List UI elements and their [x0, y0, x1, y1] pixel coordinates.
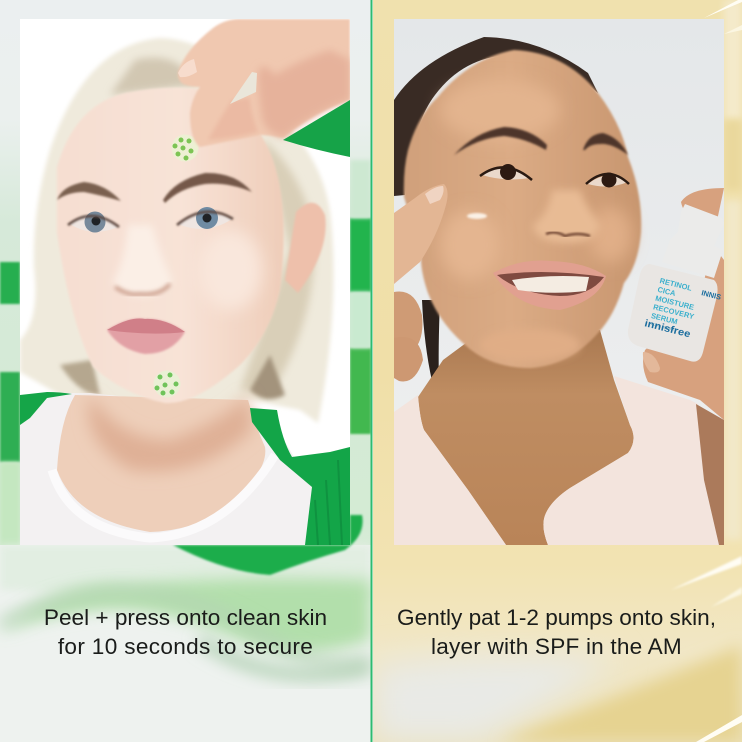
thumb over bottle	[643, 352, 660, 372]
brows	[454, 127, 547, 155]
caption: left instruction	[44, 605, 327, 658]
caption: right instruction: Gently pat 1-2 pumps onto skin,	[397, 605, 716, 630]
nose	[533, 190, 600, 243]
patch: forehead	[172, 134, 198, 162]
neck and chest	[57, 395, 265, 532]
green patch sheet	[283, 100, 350, 157]
ear	[285, 203, 326, 293]
white top	[20, 393, 312, 545]
white blouse	[394, 376, 719, 545]
bottle label: SERUM	[650, 311, 679, 326]
patch: chin	[154, 370, 180, 398]
chest and neck	[418, 330, 634, 545]
face	[404, 50, 641, 368]
caption: left instruction: Peel + press onto clean skin	[44, 605, 327, 630]
bottle side text: INNIS	[701, 288, 722, 302]
caption: right instruction: layer with SPF in the AM	[431, 634, 682, 658]
bottle label	[650, 278, 694, 331]
caption: right instruction	[397, 605, 716, 658]
face	[57, 88, 284, 403]
braids	[394, 37, 598, 196]
bottle label: RETINOL	[659, 276, 693, 293]
bottle label: MOISTURE	[654, 294, 695, 312]
bottle brand: innisfree	[643, 318, 692, 340]
eyes	[482, 168, 530, 179]
photo: woman applying serum	[394, 19, 724, 545]
fingers	[394, 184, 448, 382]
brows	[57, 182, 121, 201]
serum dab on cheek	[467, 213, 487, 219]
serum bottle	[628, 204, 724, 362]
right hand	[643, 188, 724, 420]
bottle pump	[683, 204, 721, 278]
bottle body	[628, 264, 718, 362]
hand	[178, 19, 350, 147]
caption: left instruction: for 10 seconds to secure	[58, 634, 313, 658]
photo: woman applying patches	[20, 19, 350, 545]
panel: left background	[0, 0, 371, 742]
lips	[107, 318, 185, 354]
green cardigan	[20, 392, 350, 545]
nose	[113, 225, 172, 296]
arm	[696, 404, 724, 545]
bottle label: CICA	[657, 285, 677, 298]
eyes	[72, 218, 116, 232]
side braid	[422, 300, 440, 381]
smile	[493, 260, 606, 310]
panel: right background	[373, 0, 742, 742]
hair	[20, 38, 334, 423]
bottle label: FACIAL SERUM	[649, 322, 674, 332]
divider line	[370, 0, 372, 742]
bottle label: RECOVERY	[652, 302, 695, 321]
